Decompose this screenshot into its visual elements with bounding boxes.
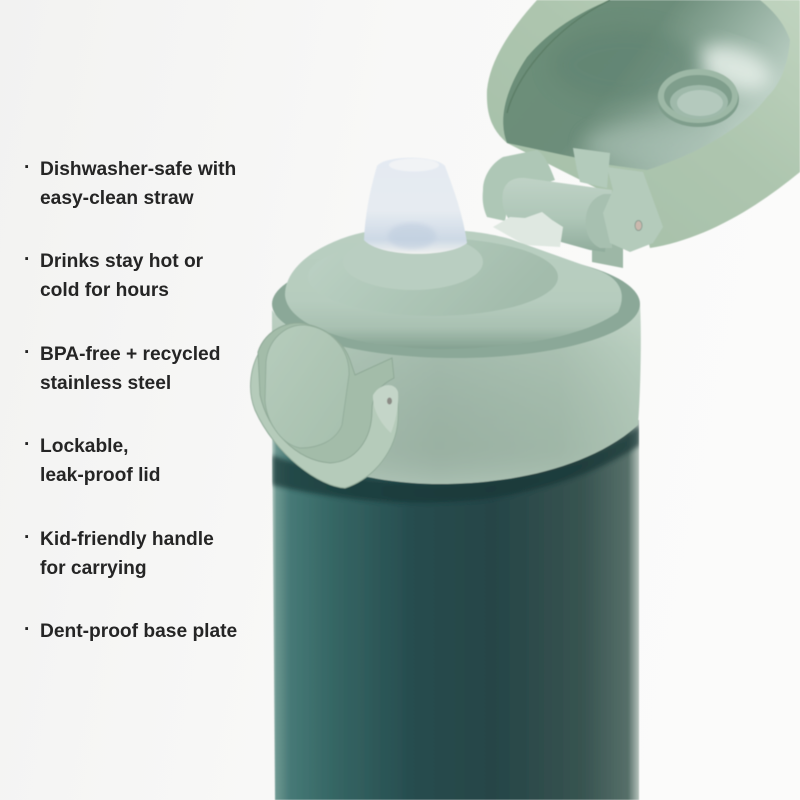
- hinge right knuckle: [603, 167, 663, 252]
- feature: dishwasher-safe: Dishwasher-safe with: [40, 159, 236, 180]
- open cap: [487, 0, 800, 248]
- cap interior groove: [507, 0, 610, 113]
- feature: hot or cold: Drinks stay hot or: [40, 251, 204, 272]
- cap interior: [503, 0, 790, 170]
- feature: BPA-free: ·: [24, 342, 30, 363]
- feature: base plate: ·: [24, 619, 30, 640]
- feature: BPA-free: [24, 342, 220, 394]
- shadow under collar: [272, 425, 640, 503]
- feature: handle: for carrying: [40, 558, 147, 579]
- feature: lockable lid: ·: [24, 434, 30, 455]
- side latch: [251, 323, 398, 488]
- hinge barrel: [502, 178, 612, 252]
- feature: hot or cold: ·: [24, 249, 30, 270]
- lid top plate: [285, 229, 622, 349]
- latch outer band: [251, 348, 398, 488]
- feature: dishwasher-safe: easy-clean straw: [40, 188, 194, 209]
- latch inner band: [258, 323, 394, 463]
- gasket ring: [657, 71, 739, 127]
- cap interior shading: [564, 34, 776, 164]
- feature: hot or cold: [24, 249, 204, 301]
- straw valve: [493, 212, 563, 247]
- feature: dishwasher-safe: [24, 157, 236, 209]
- feature: dishwasher-safe: ·: [24, 157, 30, 178]
- feature: BPA-free: stainless steel: [40, 373, 171, 394]
- inner disc: [308, 238, 558, 316]
- feature: lockable lid: leak-proof lid: [40, 465, 160, 486]
- latch button: [265, 325, 349, 448]
- feature: lockable lid: Lockable,: [40, 436, 129, 457]
- bottle illustration: [251, 0, 800, 800]
- feature: base plate: Dent-proof base plate: [40, 621, 238, 642]
- lid back lip: [272, 250, 640, 358]
- spout base: [343, 234, 483, 290]
- hinge tab: [573, 148, 610, 188]
- hinge left bracket: [483, 150, 555, 221]
- hinge pin: [635, 220, 642, 230]
- feature: handle: [24, 527, 214, 579]
- latch pivot: [373, 385, 398, 433]
- support post: [592, 240, 623, 268]
- silicone spout: [364, 158, 467, 254]
- feature: BPA-free: BPA-free + recycled: [40, 344, 220, 365]
- feature: handle: Kid-friendly handle: [40, 529, 214, 550]
- feature: handle: ·: [24, 527, 30, 548]
- latch pin: [387, 398, 392, 404]
- lid top: [272, 158, 640, 358]
- hinge barrel shoulder: [586, 194, 612, 248]
- collar shading: [272, 305, 641, 484]
- hinge: [483, 148, 663, 268]
- cap rim: [487, 0, 800, 248]
- feature: lockable lid: [24, 434, 160, 486]
- feature: hot or cold: cold for hours: [40, 280, 169, 301]
- collar: [272, 305, 641, 484]
- bottle body: [272, 420, 639, 800]
- feature list: [24, 157, 238, 642]
